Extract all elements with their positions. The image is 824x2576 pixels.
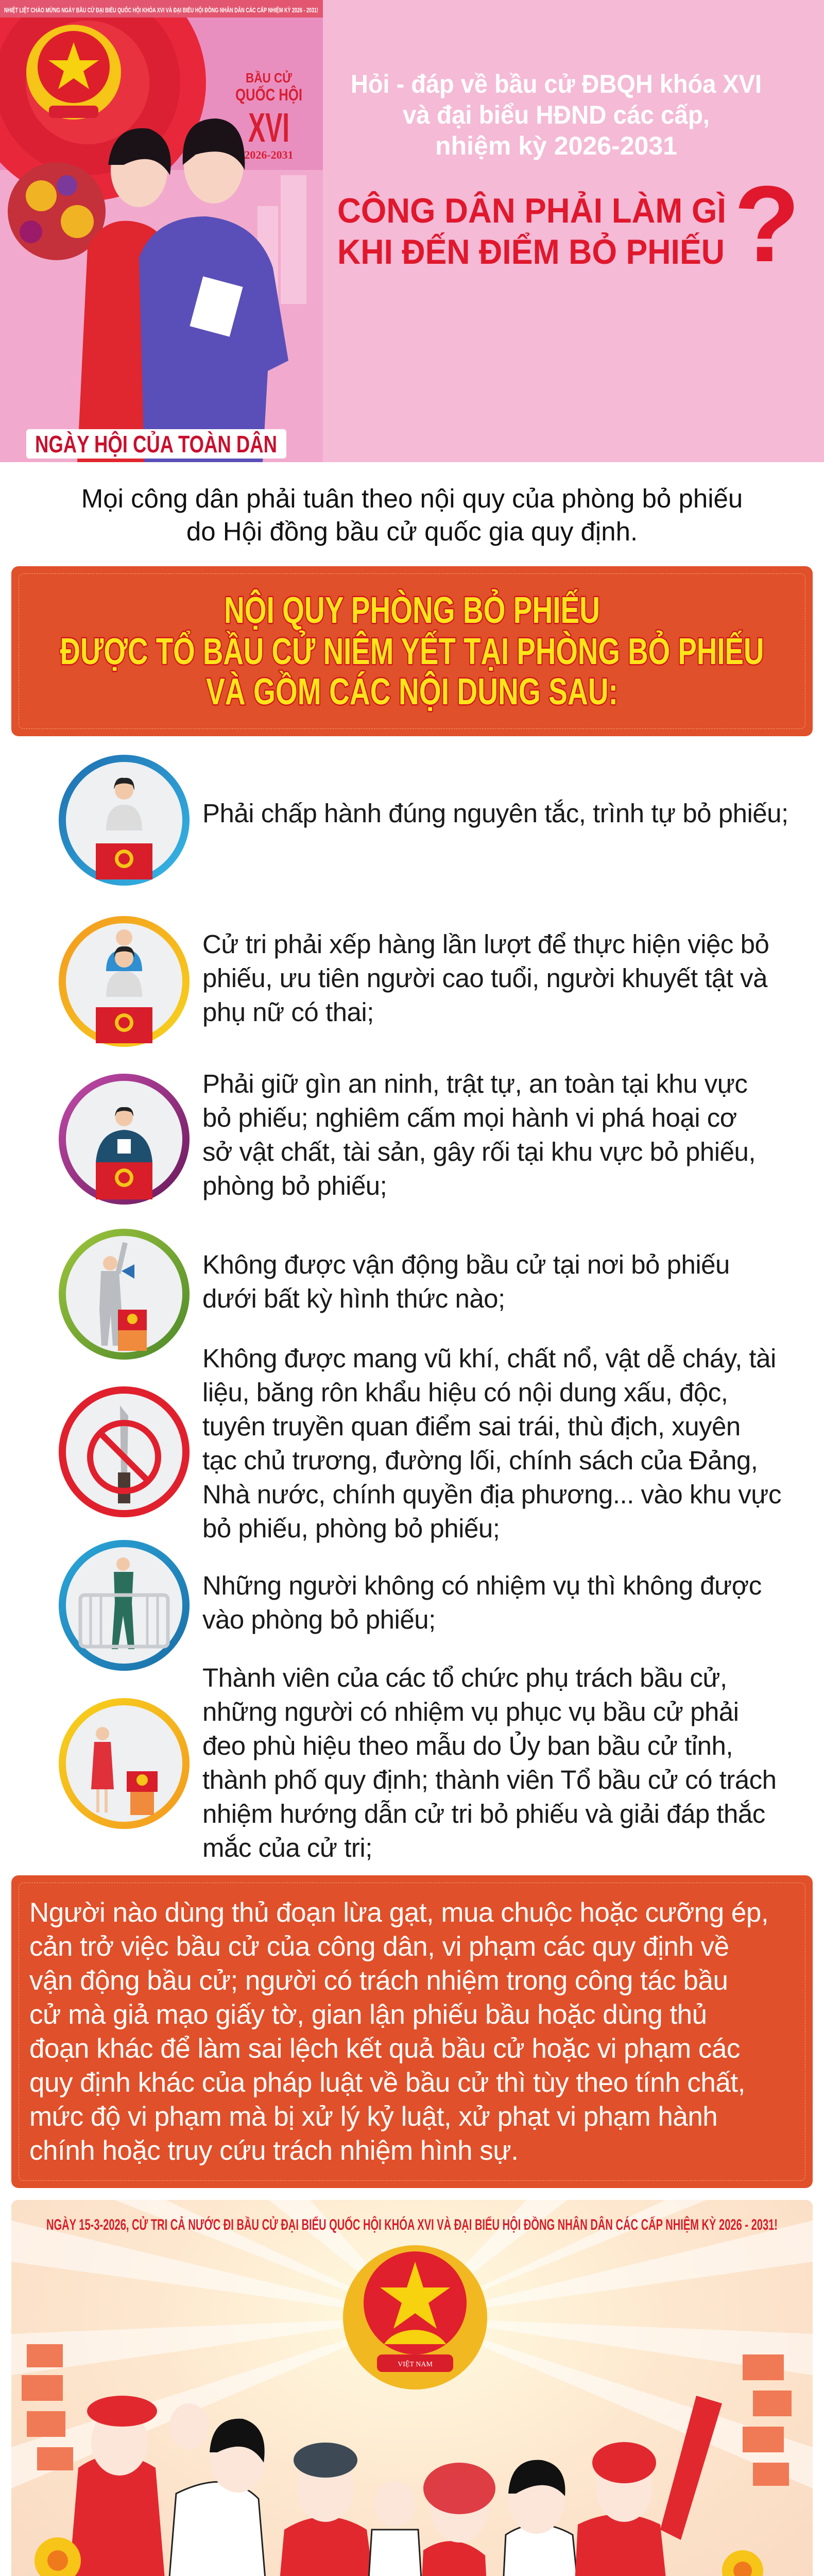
poster: election day bbox=[11, 2200, 813, 2576]
item 2 text bbox=[202, 929, 769, 1027]
item 7 text: những người có nhiệm vụ phục vụ bầu cử phải bbox=[202, 1697, 739, 1726]
header subtitle and title bbox=[337, 70, 762, 272]
header subtitle and title: Hỏi - đáp về bầu cử ĐBQH khóa XVI bbox=[351, 70, 762, 98]
violations text: Người nào dùng thủ đoạn lừa gạt, mua chuộc hoặc cưỡng ép, bbox=[29, 1897, 768, 1928]
item 7 text: thành phố quy định; thành viên Tổ bầu cử có trách bbox=[202, 1765, 776, 1794]
header subtitle and title: và đại biểu HĐND các cấp, bbox=[403, 100, 710, 129]
violations text: vận động bầu cử; người có trách nhiệm trong công tác bầu bbox=[29, 1965, 728, 1996]
icon: barrier (blue) bbox=[59, 1540, 190, 1671]
intro text bbox=[81, 484, 743, 546]
item 6 text: Những người không có nhiệm vụ thì không được bbox=[202, 1571, 762, 1600]
item 5 text: tạc chủ trương, đường lối, chính sách của Đảng, bbox=[202, 1446, 758, 1475]
item 7 text: đeo phù hiệu theo mẫu do Ủy ban bầu cử tỉnh, bbox=[202, 1731, 733, 1760]
item 7 text: mắc của cử tri; bbox=[202, 1833, 372, 1862]
item 2 text: phiếu, ưu tiên người cao tuổi, người khuyết tật và bbox=[202, 963, 767, 993]
item 4 text bbox=[202, 1250, 730, 1313]
icon: question mark: ? bbox=[734, 163, 800, 284]
item 5 text: Nhà nước, chính quyền địa phương... vào khu vực bbox=[202, 1480, 781, 1509]
header poster illustration bbox=[0, 0, 323, 462]
item 6 text bbox=[202, 1571, 762, 1634]
intro text: Mọi công dân phải tuân theo nội quy của phòng bỏ phiếu bbox=[81, 484, 743, 513]
item 5 text: Không được mang vũ khí, chất nổ, vật dễ cháy, tài bbox=[202, 1344, 776, 1373]
violations text: mức độ vi phạm mà bị xử lý kỷ luật, xử phạt vi phạm hành bbox=[29, 2102, 717, 2132]
heading text: VÀ GỒM CÁC NỘI DUNG SAU: bbox=[206, 671, 618, 713]
panel: violations bbox=[11, 1875, 813, 2188]
heading text bbox=[59, 588, 764, 713]
violations text: đoạn khác để làm sai lệch kết quả bầu cử hoặc vi phạm các bbox=[29, 2033, 740, 2064]
icon: voter at ballot box (blue) bbox=[59, 755, 190, 886]
violations text: cản trở việc bầu cử của công dân, vi phạm các quy định về bbox=[29, 1931, 729, 1962]
violations text: cử mà giả mạo giấy tờ, gian lận phiếu bầu hoặc dùng thủ bbox=[29, 1999, 707, 2030]
item 3 text: bỏ phiếu; nghiêm cấm mọi hành vi phá hoại cơ bbox=[202, 1103, 737, 1132]
item 3 text: phòng bỏ phiếu; bbox=[202, 1171, 387, 1200]
item 3 text: sở vật chất, tài sản, gây rối tại khu vực bỏ phiếu, bbox=[202, 1137, 756, 1166]
violations text: quy định khác của pháp luật về bầu cử thì tùy theo tính chất, bbox=[29, 2067, 745, 2098]
violations text bbox=[29, 1897, 768, 2166]
item 3 text bbox=[202, 1069, 756, 1200]
item 2 text: phụ nữ có thai; bbox=[202, 997, 374, 1027]
icon: campaigning (green) bbox=[59, 1229, 190, 1360]
item 5 text: bỏ phiếu, phòng bỏ phiếu; bbox=[202, 1514, 500, 1543]
header poster illustration: BẦU CỬ bbox=[246, 70, 292, 86]
heading text: NỘI QUY PHÒNG BỎ PHIẾU bbox=[224, 589, 600, 631]
header poster illustration: XVI bbox=[248, 105, 289, 150]
icon: no weapons (red) bbox=[59, 1386, 190, 1517]
item 2 text: Cử tri phải xếp hàng lần lượt để thực hiện việc bỏ bbox=[202, 929, 769, 959]
item 5 text: liệu, băng rôn khẩu hiệu có nội dung xấu, độc, bbox=[202, 1378, 728, 1407]
header subtitle and title: CÔNG DÂN PHẢI LÀM GÌ bbox=[337, 191, 726, 230]
icon: queue (orange) bbox=[59, 916, 190, 1047]
item 4 text: Không được vận động bầu cử tại nơi bỏ phiếu bbox=[202, 1250, 730, 1279]
panel: rules heading bbox=[11, 566, 813, 736]
violations text: chính hoặc truy cứu trách nhiệm hình sự. bbox=[29, 2136, 519, 2166]
item 3 text: Phải giữ gìn an ninh, trật tự, an toàn tại khu vực bbox=[202, 1069, 747, 1098]
poster: election day: VIỆT NAM bbox=[398, 2360, 433, 2368]
header poster illustration: 2026-2031 bbox=[244, 148, 294, 161]
item 1 text: Phải chấp hành đúng nguyên tắc, trình tự bỏ phiếu; bbox=[202, 799, 788, 828]
intro text: do Hội đồng bầu cử quốc gia quy định. bbox=[186, 517, 638, 546]
icon: election officer (yellow) bbox=[59, 1698, 190, 1829]
item 6 text: vào phòng bỏ phiếu; bbox=[202, 1605, 436, 1634]
item 5 text: tuyên truyền quan điểm sai trái, thù địch, xuyên bbox=[202, 1412, 741, 1441]
header subtitle and title: KHI ĐẾN ĐIỂM BỎ PHIẾU bbox=[337, 232, 725, 272]
header panel bbox=[0, 0, 824, 462]
icon: security (purple) bbox=[59, 1074, 190, 1205]
item 7 text: Thành viên của các tổ chức phụ trách bầu cử, bbox=[202, 1663, 727, 1692]
header subtitle and title: nhiệm kỳ 2026-2031 bbox=[435, 131, 677, 160]
item 4 text: dưới bất kỳ hình thức nào; bbox=[202, 1284, 505, 1313]
item 5 text bbox=[202, 1344, 781, 1543]
header poster illustration: QUỐC HỘI bbox=[235, 86, 302, 104]
item 7 text bbox=[202, 1663, 776, 1862]
item 7 text: nhiệm hướng dẫn cử tri bỏ phiếu và giải đáp thắc bbox=[202, 1799, 765, 1828]
